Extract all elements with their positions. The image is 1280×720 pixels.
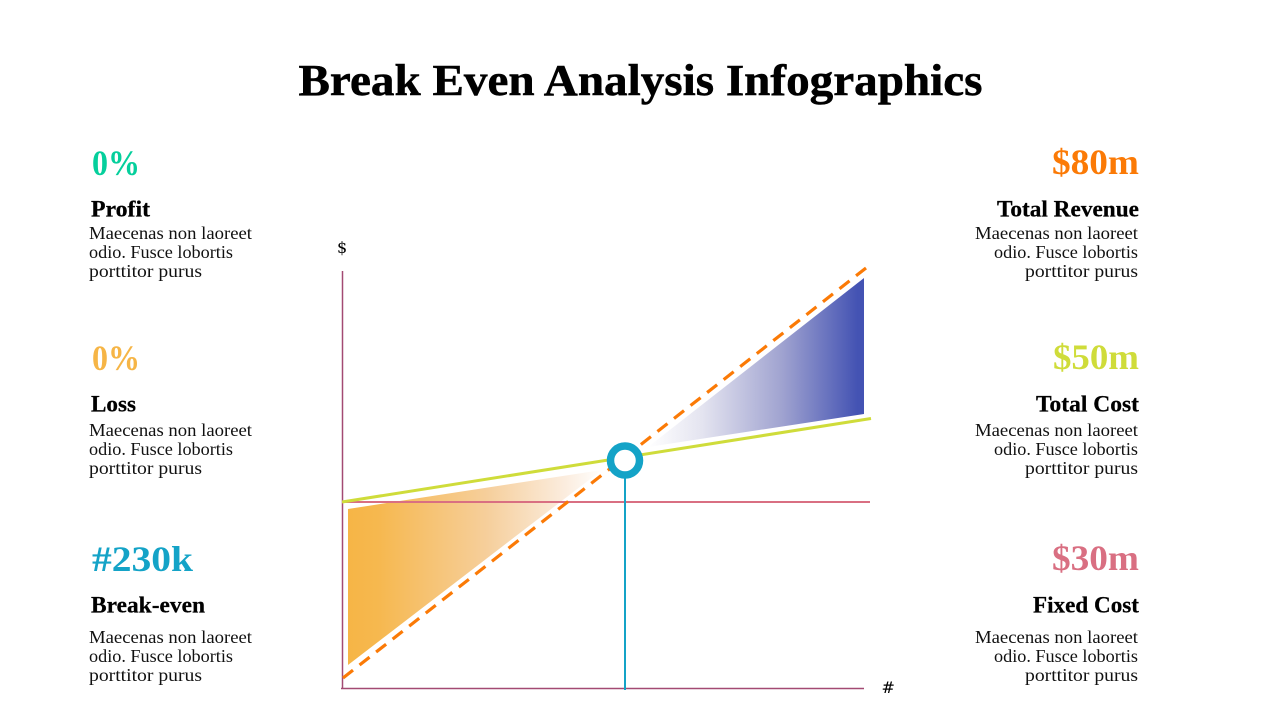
profit text: odio. Fusce lobortis — [89, 242, 233, 262]
profit heading: Profit — [91, 196, 150, 222]
loss text: porttitor purus — [89, 458, 202, 478]
total revenue text: porttitor purus — [1025, 261, 1138, 281]
profit value: 0% — [92, 143, 140, 183]
loss value: 0% — [92, 338, 140, 378]
panel: break-even — [89, 539, 252, 685]
y axis — [342, 271, 344, 689]
chart: break-even — [337, 238, 895, 697]
fixed cost text: Maecenas non laoreet — [975, 627, 1138, 647]
total cost line — [342, 418, 871, 502]
total cost text — [975, 420, 1138, 478]
total revenue heading: Total Revenue — [997, 196, 1139, 222]
loss text: Maecenas non laoreet — [89, 420, 252, 440]
break-even value: #230k — [92, 539, 193, 579]
break-even text: Maecenas non laoreet — [89, 627, 252, 647]
total cost value: $50m — [1053, 337, 1139, 377]
total revenue line — [343, 268, 866, 678]
break-even text — [89, 627, 252, 685]
panel: fixed cost — [975, 538, 1139, 685]
break-even marker — [610, 446, 640, 475]
title: Break Even Analysis Infographics — [298, 56, 982, 105]
fixed cost value: $30m — [1052, 538, 1139, 578]
total revenue text: odio. Fusce lobortis — [994, 242, 1138, 262]
fixed cost text: odio. Fusce lobortis — [994, 646, 1138, 666]
break-even heading: Break-even — [91, 592, 205, 618]
axis label: dollars: $ — [337, 238, 347, 257]
x axis — [341, 688, 864, 690]
total cost heading: Total Cost — [1036, 392, 1139, 416]
fixed cost text — [975, 627, 1138, 685]
fixed cost text: porttitor purus — [1025, 665, 1138, 685]
profit text — [89, 223, 252, 281]
profit text: Maecenas non laoreet — [89, 223, 252, 243]
break-even text: porttitor purus — [89, 665, 202, 685]
panel: total cost — [975, 337, 1139, 478]
fixed cost heading: Fixed Cost — [1033, 592, 1139, 618]
total cost text: porttitor purus — [1025, 458, 1138, 478]
panel: loss — [89, 338, 252, 478]
panel: profit — [89, 143, 252, 281]
loss heading: Loss — [91, 392, 136, 416]
total revenue text: Maecenas non laoreet — [975, 223, 1138, 243]
fixed cost line — [342, 501, 870, 503]
break-even drop line — [624, 470, 626, 690]
total revenue value: $80m — [1052, 142, 1139, 182]
axis label: units: # — [882, 678, 895, 697]
profit area — [648, 278, 864, 447]
total revenue text — [975, 223, 1138, 281]
break-even text: odio. Fusce lobortis — [89, 646, 233, 666]
total cost text: odio. Fusce lobortis — [994, 439, 1138, 459]
panel: total revenue — [975, 142, 1139, 281]
total cost text: Maecenas non laoreet — [975, 420, 1138, 440]
loss text: odio. Fusce lobortis — [89, 439, 233, 459]
profit text: porttitor purus — [89, 261, 202, 281]
loss area — [348, 470, 602, 665]
loss text — [89, 420, 252, 478]
